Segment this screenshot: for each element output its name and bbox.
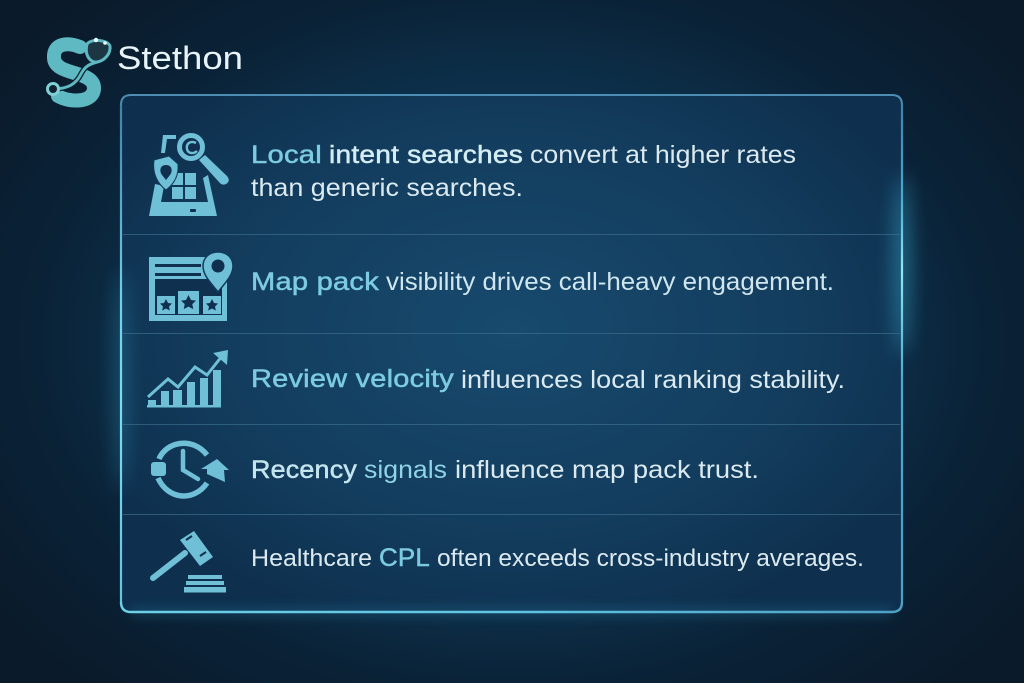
- row 5: healthcare CPL: [153, 531, 864, 592]
- text: local intent: convert at higher rates: [530, 141, 796, 169]
- text: healthcare CPL: CPL: [379, 544, 430, 572]
- icon: map search tablet: [149, 135, 229, 216]
- row 3: review velocity: [147, 350, 845, 408]
- icon: clock with arrow: [151, 443, 229, 496]
- logo: Stethon: [48, 38, 243, 101]
- text: map pack: Map pack: [251, 268, 379, 296]
- text: recency: Recency: [251, 456, 357, 484]
- text: review velocity: Review velocity: [251, 365, 454, 393]
- text: healthcare CPL: often exceeds cross-industry averages.: [437, 545, 864, 572]
- text: local intent: [251, 141, 796, 202]
- row 1: local intent: [149, 135, 796, 216]
- icon: S with stethoscope: [48, 38, 110, 101]
- text: recency: influence map pack trust.: [455, 456, 759, 484]
- icon: gavel: [153, 531, 226, 592]
- text: local intent: Local: [251, 141, 322, 169]
- text: healthcare CPL: Healthcare: [251, 545, 372, 572]
- panel: key findings card: [114, 95, 911, 612]
- text: local intent: than generic searches.: [251, 174, 523, 202]
- text: review velocity: influences local ranking stability.: [461, 366, 845, 394]
- text: map pack: visibility drives call-heavy engagement.: [386, 268, 834, 296]
- text: recency: [251, 456, 759, 484]
- text: healthcare CPL: [251, 544, 864, 572]
- wordmark: Stethon: [117, 40, 243, 76]
- text: review velocity: [251, 365, 845, 394]
- row 2: map pack: [149, 252, 834, 321]
- icon: growth chart: [147, 350, 228, 408]
- row 4: recency: [151, 443, 759, 496]
- text: recency: signals: [364, 456, 447, 484]
- text: local intent: intent searches: [329, 141, 523, 169]
- icon: map listing with stars: [149, 252, 233, 321]
